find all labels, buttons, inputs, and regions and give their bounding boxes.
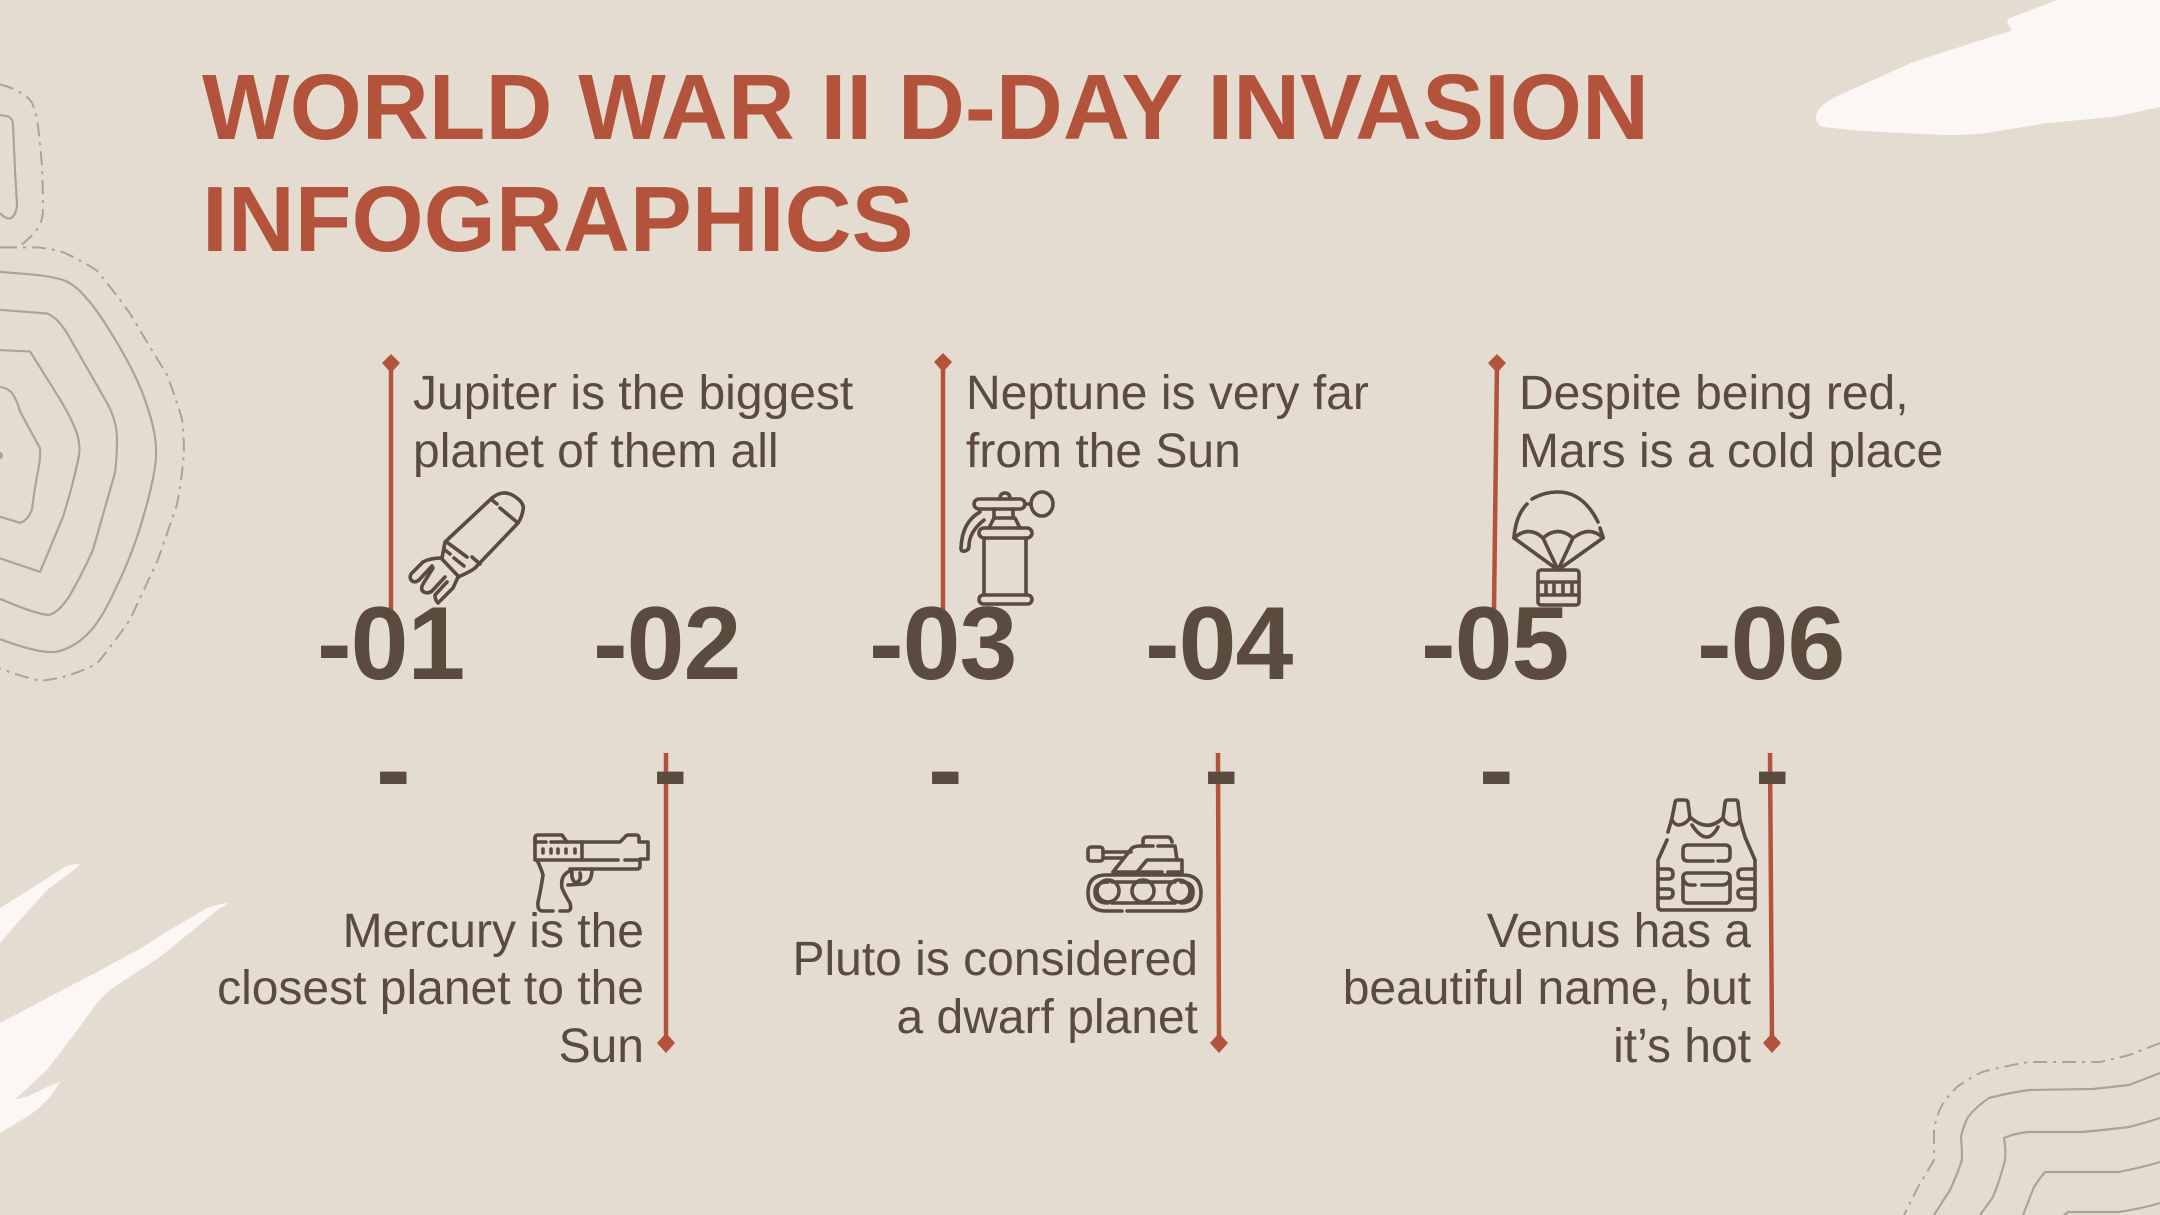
icon: grenade	[961, 492, 1053, 604]
number 03	[869, 586, 1016, 828]
contour lines: bottom right	[1904, 1043, 2160, 1215]
marker line 05	[1488, 354, 1506, 610]
text: Pluto: Pluto is considered	[792, 933, 1198, 986]
text: Neptune: Neptune is very far	[966, 367, 1369, 420]
text: Venus: it’s hot	[1613, 1020, 1751, 1073]
number 04	[1145, 586, 1293, 828]
number 05	[1421, 586, 1568, 828]
number 01: -01	[317, 586, 464, 702]
title: WORLD WAR II D-DAY INVASION	[202, 55, 1649, 159]
marker line 06	[1763, 753, 1781, 1053]
text: Neptune: from the Sun	[966, 425, 1241, 478]
icon: tank	[1088, 837, 1201, 911]
number 04: -04	[1145, 586, 1293, 702]
number 06: -	[1755, 712, 1789, 828]
number 05: -	[1479, 712, 1513, 828]
marker line 01	[382, 354, 400, 610]
text: Mercury: Sun	[559, 1020, 644, 1073]
number 04: -	[1204, 712, 1238, 828]
text: Jupiter: planet of them all	[413, 425, 779, 478]
text: Mars: Despite being red,	[1519, 367, 1909, 420]
number 06: -06	[1697, 586, 1844, 702]
number 03: -03	[869, 586, 1016, 702]
icon: bomb	[410, 493, 523, 603]
number 01	[317, 586, 464, 828]
title: INFOGRAPHICS	[202, 167, 913, 271]
text: Venus: Venus has a	[1487, 905, 1751, 958]
number 02: -	[653, 712, 687, 828]
number 02: -02	[593, 586, 740, 702]
text: Mercury: Mercury is the	[343, 905, 644, 958]
text: Venus: beautiful name, but	[1343, 962, 1751, 1015]
text: Pluto: a dwarf planet	[896, 991, 1198, 1044]
contour lines: left	[0, 84, 184, 681]
icon: parachute	[1514, 492, 1603, 605]
marker line 04	[1210, 753, 1228, 1053]
marker line 03	[934, 353, 952, 610]
number 01: -	[376, 712, 410, 828]
text: Jupiter: Jupiter is the biggest	[413, 367, 853, 420]
brush stroke: top right	[1816, 0, 2160, 135]
number 02	[593, 586, 740, 828]
brush strokes: bottom left	[0, 864, 228, 1133]
icon: vest	[1658, 800, 1755, 910]
number 06	[1697, 586, 1844, 828]
number 05: -05	[1421, 586, 1568, 702]
text: Mercury: closest planet to the	[217, 962, 644, 1015]
marker line 02	[657, 753, 675, 1053]
text: Mars: Mars is a cold place	[1519, 425, 1943, 478]
number 03: -	[928, 712, 962, 828]
icon: pistol	[535, 835, 648, 911]
